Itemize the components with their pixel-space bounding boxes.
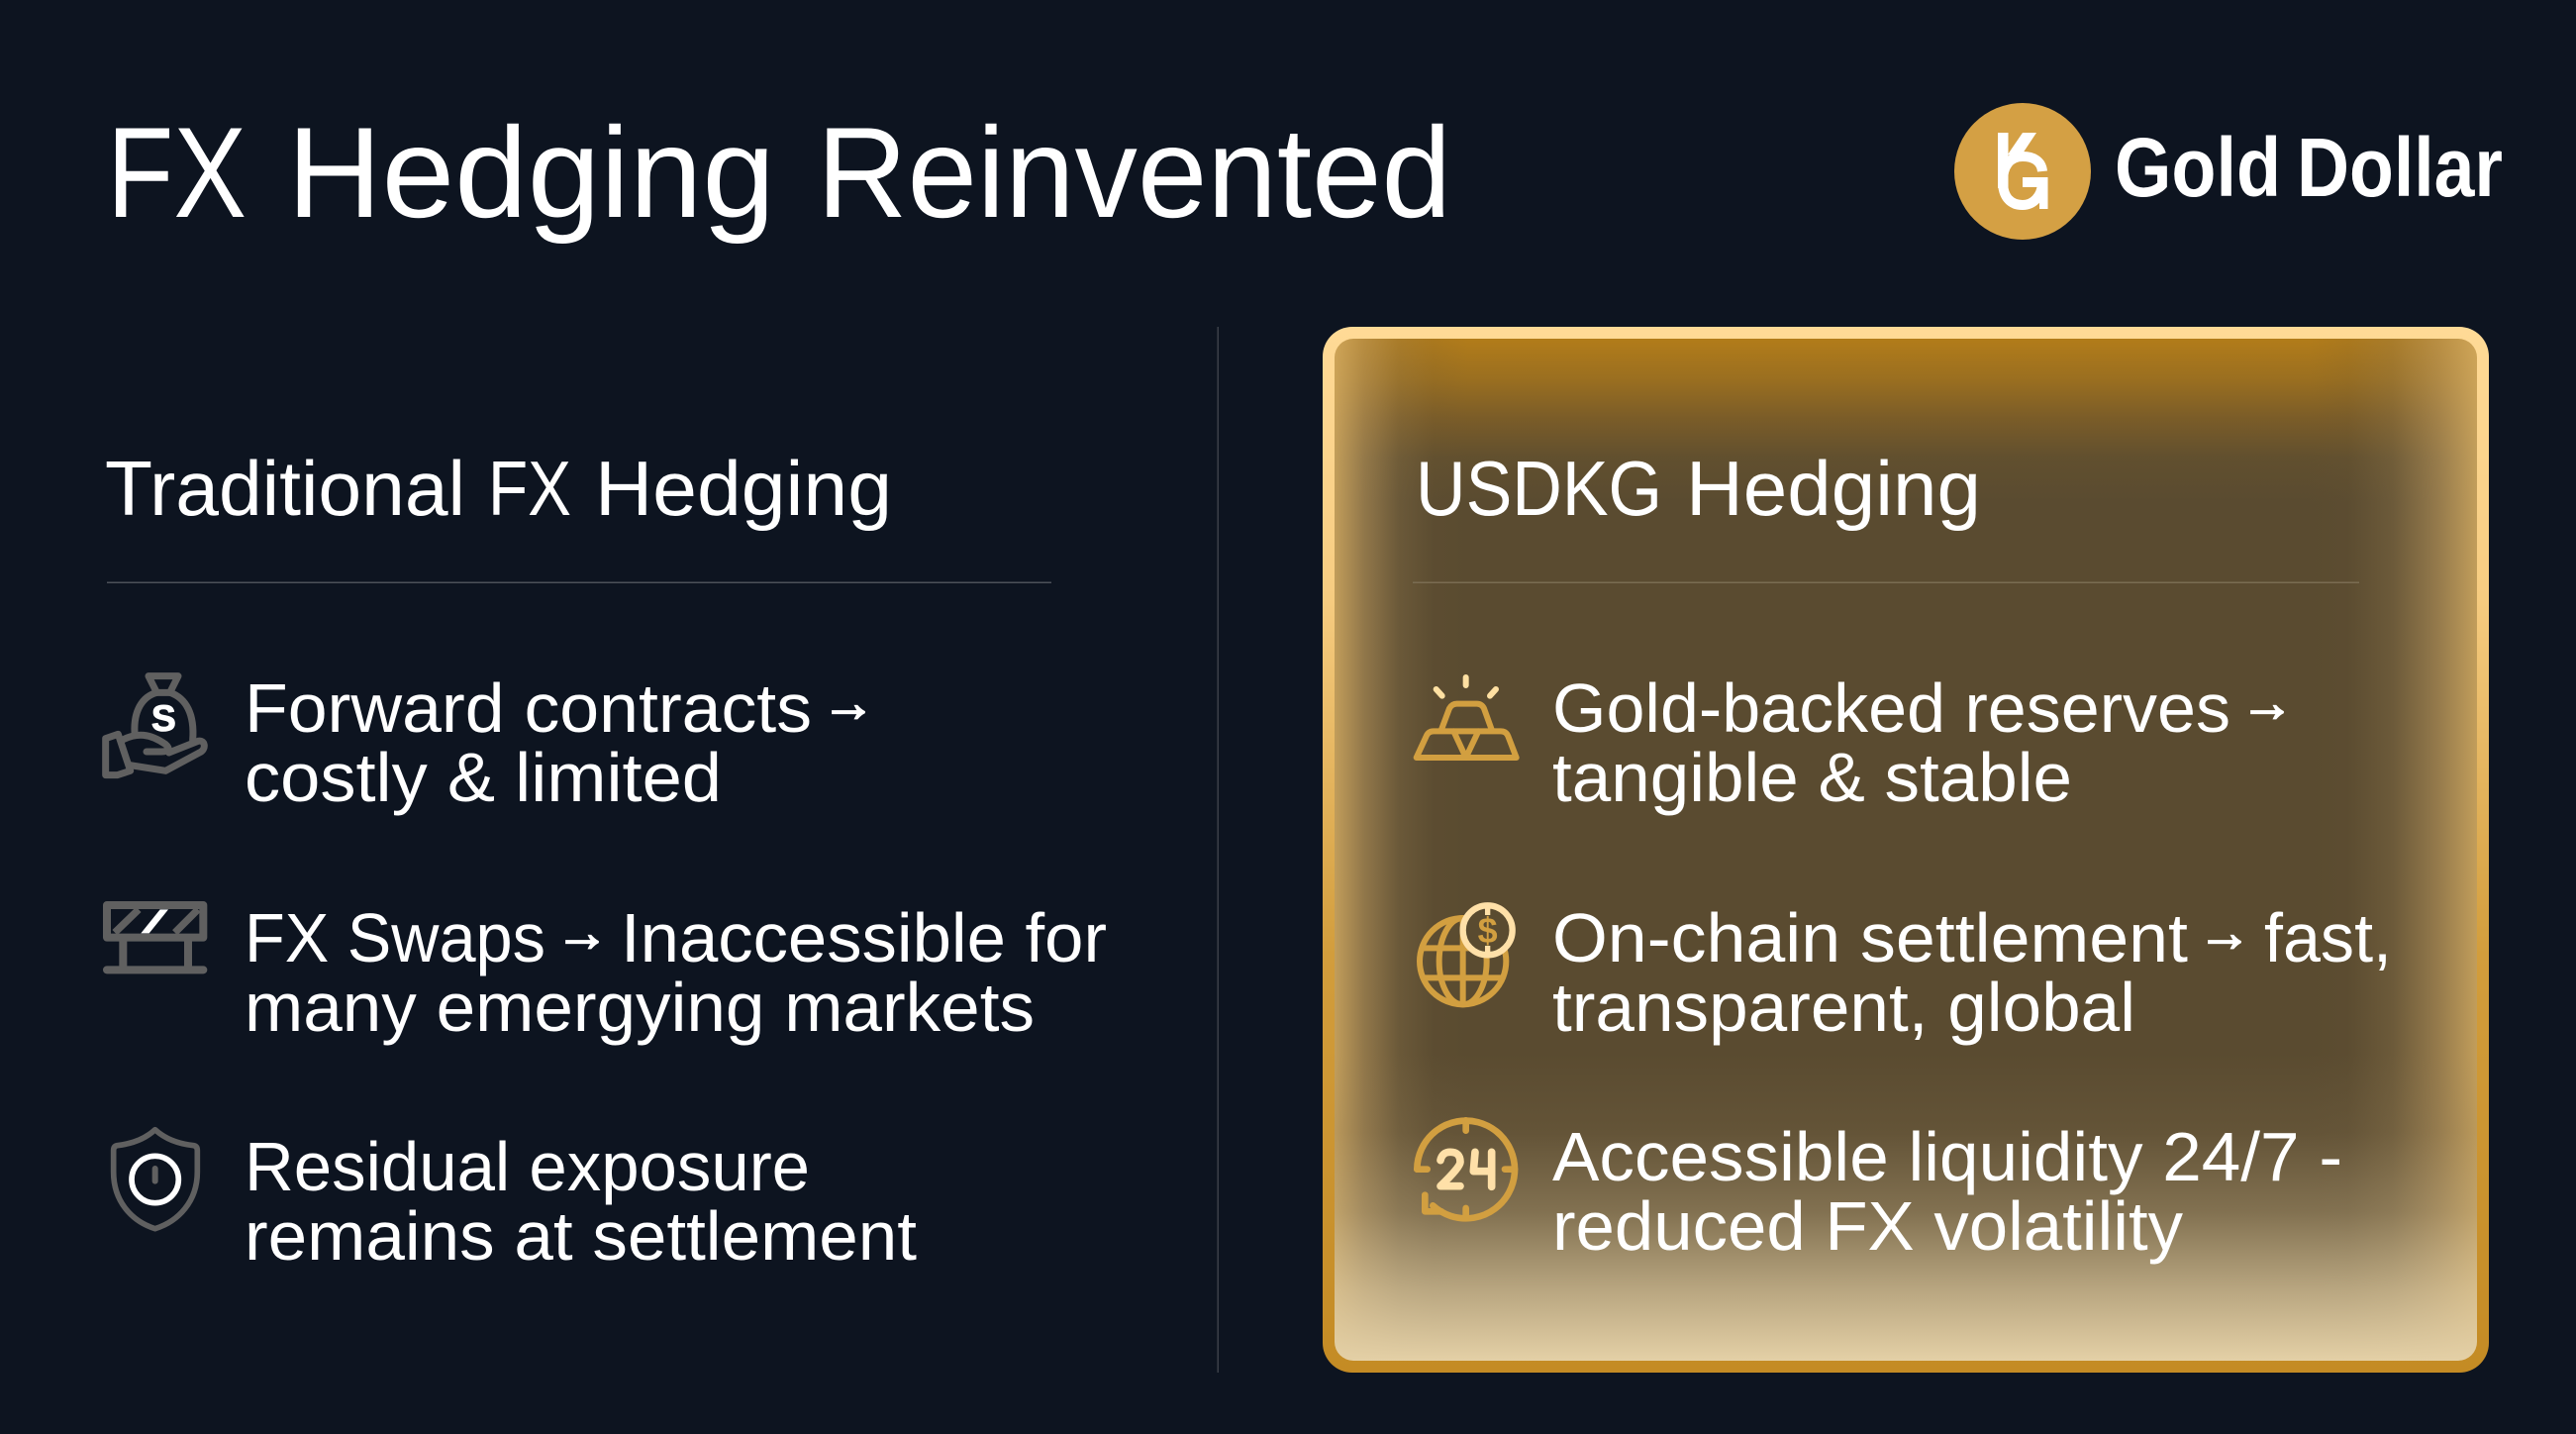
heading rule: [107, 582, 1051, 583]
panel: traditional FX hedging: [105, 445, 1107, 1275]
item text: FX swaps: many emergying markets: [245, 969, 1035, 1046]
item text: gold-backed reserves: →: [2240, 673, 2294, 733]
item text: FX swaps: →: [555, 903, 609, 963]
item text: forward contracts: costly & limited: [245, 739, 722, 816]
icon: money bag in hand: S: [151, 697, 176, 739]
panel: USDKG hedging: [1323, 327, 2489, 1373]
item text: on-chain settlement: transparent, global: [1552, 969, 2135, 1046]
item text: FX swaps: FX Swaps: [245, 899, 545, 976]
title: FX: [107, 100, 247, 245]
icon: shield: [114, 1130, 197, 1229]
logo: Gold Dollar: [1954, 103, 2503, 240]
heading: USDKG: USDKG: [1416, 445, 1662, 532]
item text: gold-backed reserves: [1552, 669, 2294, 816]
item text: forward contracts: →: [822, 673, 875, 733]
title: Reinvented: [817, 100, 1451, 245]
icon: 24 hour clock: [1417, 1120, 1515, 1218]
logo wordmark: Dollar: [2297, 121, 2503, 214]
item text: accessible liquidity: [1552, 1118, 2342, 1265]
icon: roadblock barrier: [107, 905, 203, 970]
center divider: [1218, 327, 1219, 1373]
item text: accessible liquidity: reduced FX volatility: [1552, 1187, 2183, 1265]
logo wordmark: [2115, 121, 2503, 214]
icon: money bag in hand: [106, 676, 204, 775]
heading: traditional: FX: [488, 445, 571, 532]
item text: on-chain settlement: fast,: [2264, 899, 2392, 976]
icon: globe with dollar: [1420, 905, 1513, 1004]
heading rule: [1413, 582, 2359, 583]
item text: residual exposure: remains at settlement: [245, 1197, 917, 1275]
item text: on-chain settlement: On-chain settlement: [1552, 899, 2188, 976]
item text: on-chain settlement: [1552, 899, 2392, 1046]
item text: residual exposure: Residual exposure: [245, 1128, 810, 1205]
item text: gold-backed reserves: tangible & stable: [1552, 739, 2072, 816]
heading: traditional: Traditional: [105, 445, 465, 532]
logo wordmark: Gold: [2115, 121, 2281, 214]
logo mark: [1954, 103, 2091, 240]
item text: accessible liquidity: Accessible liquidity 24/7 -: [1552, 1118, 2342, 1195]
title: Hedging: [287, 100, 775, 245]
item text: residual exposure: [245, 1128, 917, 1275]
heading: traditional: Hedging: [595, 445, 892, 532]
item text: on-chain settlement: →: [2198, 903, 2251, 963]
heading: traditional: [105, 445, 892, 532]
heading: USDKG: [1416, 445, 1981, 532]
item text: gold-backed reserves: Gold-backed reserves: [1552, 669, 2230, 747]
heading: USDKG: Hedging: [1686, 445, 1981, 532]
title: [107, 100, 1451, 245]
icon: gold bars: [1417, 677, 1517, 758]
item text: forward contracts: [245, 669, 875, 816]
item text: FX swaps: Inaccessible for: [621, 899, 1107, 976]
item text: FX swaps: [245, 899, 1107, 1046]
item text: forward contracts: Forward contracts: [245, 669, 812, 747]
icon: globe with dollar: $: [1478, 910, 1498, 951]
